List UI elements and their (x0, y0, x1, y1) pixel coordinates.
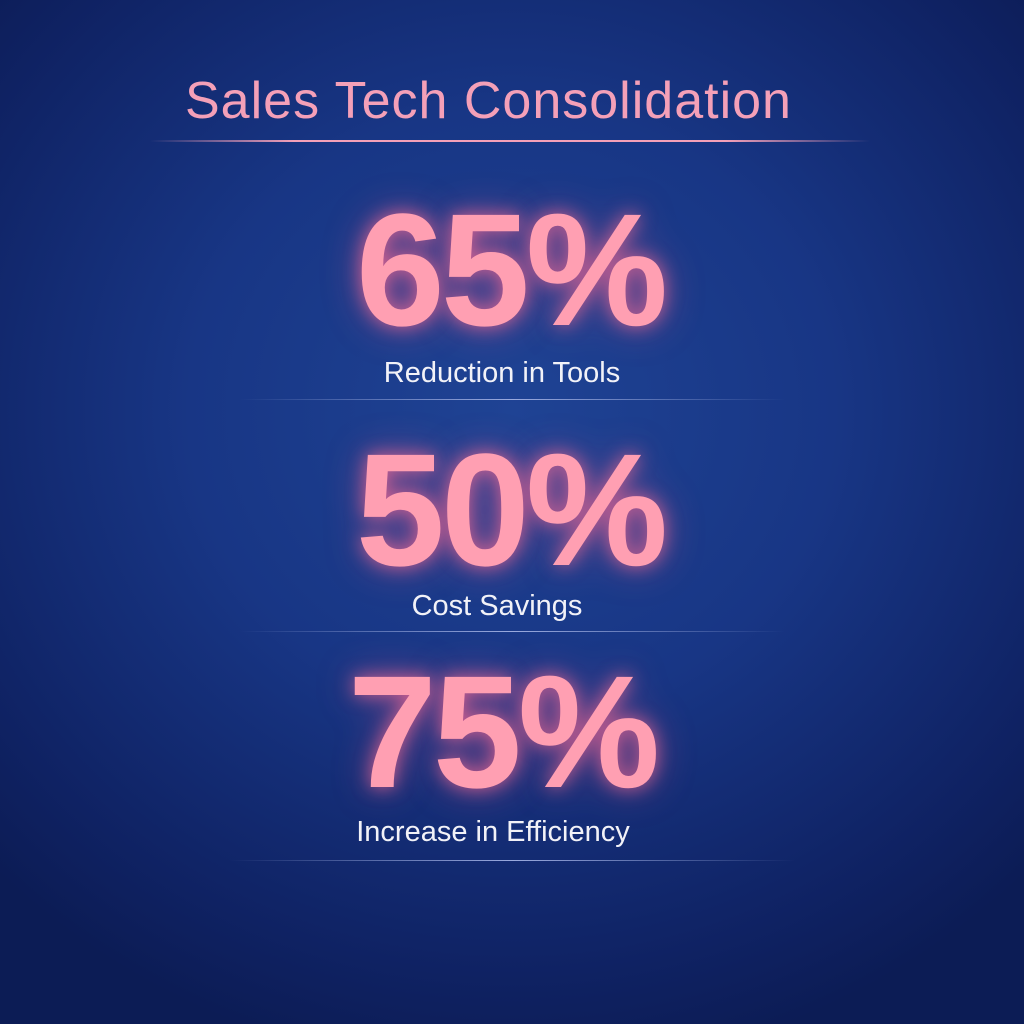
stat: 50%: Cost Savings (412, 590, 582, 622)
stat: 65%: 65% (356, 180, 664, 359)
stat: 75%: Increase in Efficiency (356, 816, 630, 848)
stat: 65%: Reduction in Tools (384, 357, 620, 389)
title: Sales Tech Consolidation (185, 72, 792, 130)
stat: 75%: 75% (348, 642, 656, 821)
stat: 50%: 50% (356, 420, 664, 599)
